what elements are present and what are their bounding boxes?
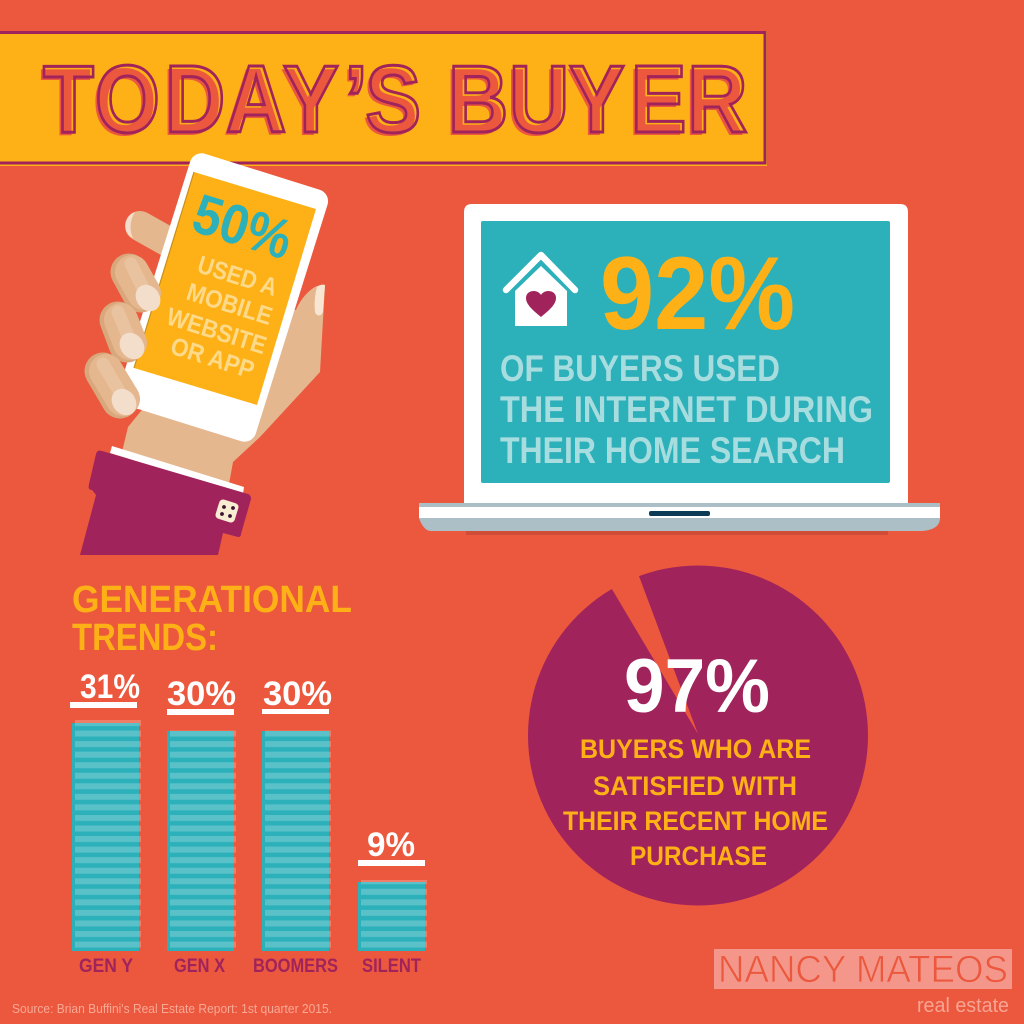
laptop screen [481, 221, 890, 483]
bar: boomers: 30% [263, 675, 332, 713]
laptop lid [464, 204, 908, 503]
jacket sleeve [80, 451, 251, 555]
bar: gen y: 31% [80, 668, 140, 706]
bar: boomers [253, 675, 338, 977]
shirt cuff [110, 446, 244, 494]
phone screen [134, 172, 316, 405]
laptop base [419, 503, 940, 531]
pie caption: SATISFIED WITH [593, 771, 797, 801]
laptop caption [500, 348, 873, 471]
phone caption [163, 251, 281, 385]
icon: house with heart [506, 255, 575, 326]
illustration: hand holding phone [80, 150, 331, 555]
laptop [419, 204, 940, 535]
laptop statistic: 92% [600, 236, 795, 352]
bar: gen x: 30% [167, 675, 236, 713]
bar: silent: SILENT [362, 956, 421, 977]
pie caption: THEIR RECENT HOME [563, 806, 828, 836]
fingers [103, 264, 144, 400]
phone caption: WEBSITE [163, 303, 270, 360]
phone caption: USED A [194, 251, 281, 302]
bar: silent [358, 826, 427, 977]
phone [115, 150, 331, 445]
heading: generational trends: TRENDS: [72, 617, 218, 659]
palm and thumb [122, 285, 325, 484]
bar: gen y [70, 668, 141, 977]
logo [714, 949, 1012, 1017]
bar: gen y: GEN Y [79, 956, 133, 977]
pie caption [563, 734, 828, 871]
logo: NANCY MATEOS [718, 949, 1008, 991]
phone caption: MOBILE [183, 278, 276, 331]
bar chart [70, 668, 427, 977]
back finger [125, 212, 172, 244]
title: TODAY’S BUYER [43, 47, 748, 153]
laptop caption: OF BUYERS USED [500, 348, 780, 389]
thumb nail [315, 285, 325, 315]
title: TODAY’S BUYER [40, 50, 745, 156]
sleeve button [215, 499, 239, 523]
source note: Source: Brian Buffini's Real Estate Report: 1st quarter 2015. [12, 1002, 332, 1016]
bar: gen x [167, 675, 236, 977]
pie chart: 97 percent [528, 560, 868, 906]
bar: boomers: BOOMERS [253, 956, 338, 977]
title banner [0, 31, 767, 166]
laptop caption: THE INTERNET DURING [500, 389, 873, 430]
logo: real estate [917, 995, 1009, 1017]
phone statistic: 50% [186, 181, 300, 271]
heading: generational trends [72, 579, 352, 659]
pie statistic: 97% [624, 644, 770, 729]
heading: generational trends: GENERATIONAL [72, 579, 352, 621]
phone caption: OR APP [167, 332, 258, 385]
bar: gen x: GEN X [174, 956, 225, 977]
pie caption: PURCHASE [630, 841, 767, 871]
laptop caption: THEIR HOME SEARCH [500, 430, 845, 471]
laptop shadow [466, 530, 888, 535]
finger nails [107, 280, 165, 420]
bar: silent: 9% [367, 826, 415, 864]
pie caption: BUYERS WHO ARE [580, 734, 811, 764]
